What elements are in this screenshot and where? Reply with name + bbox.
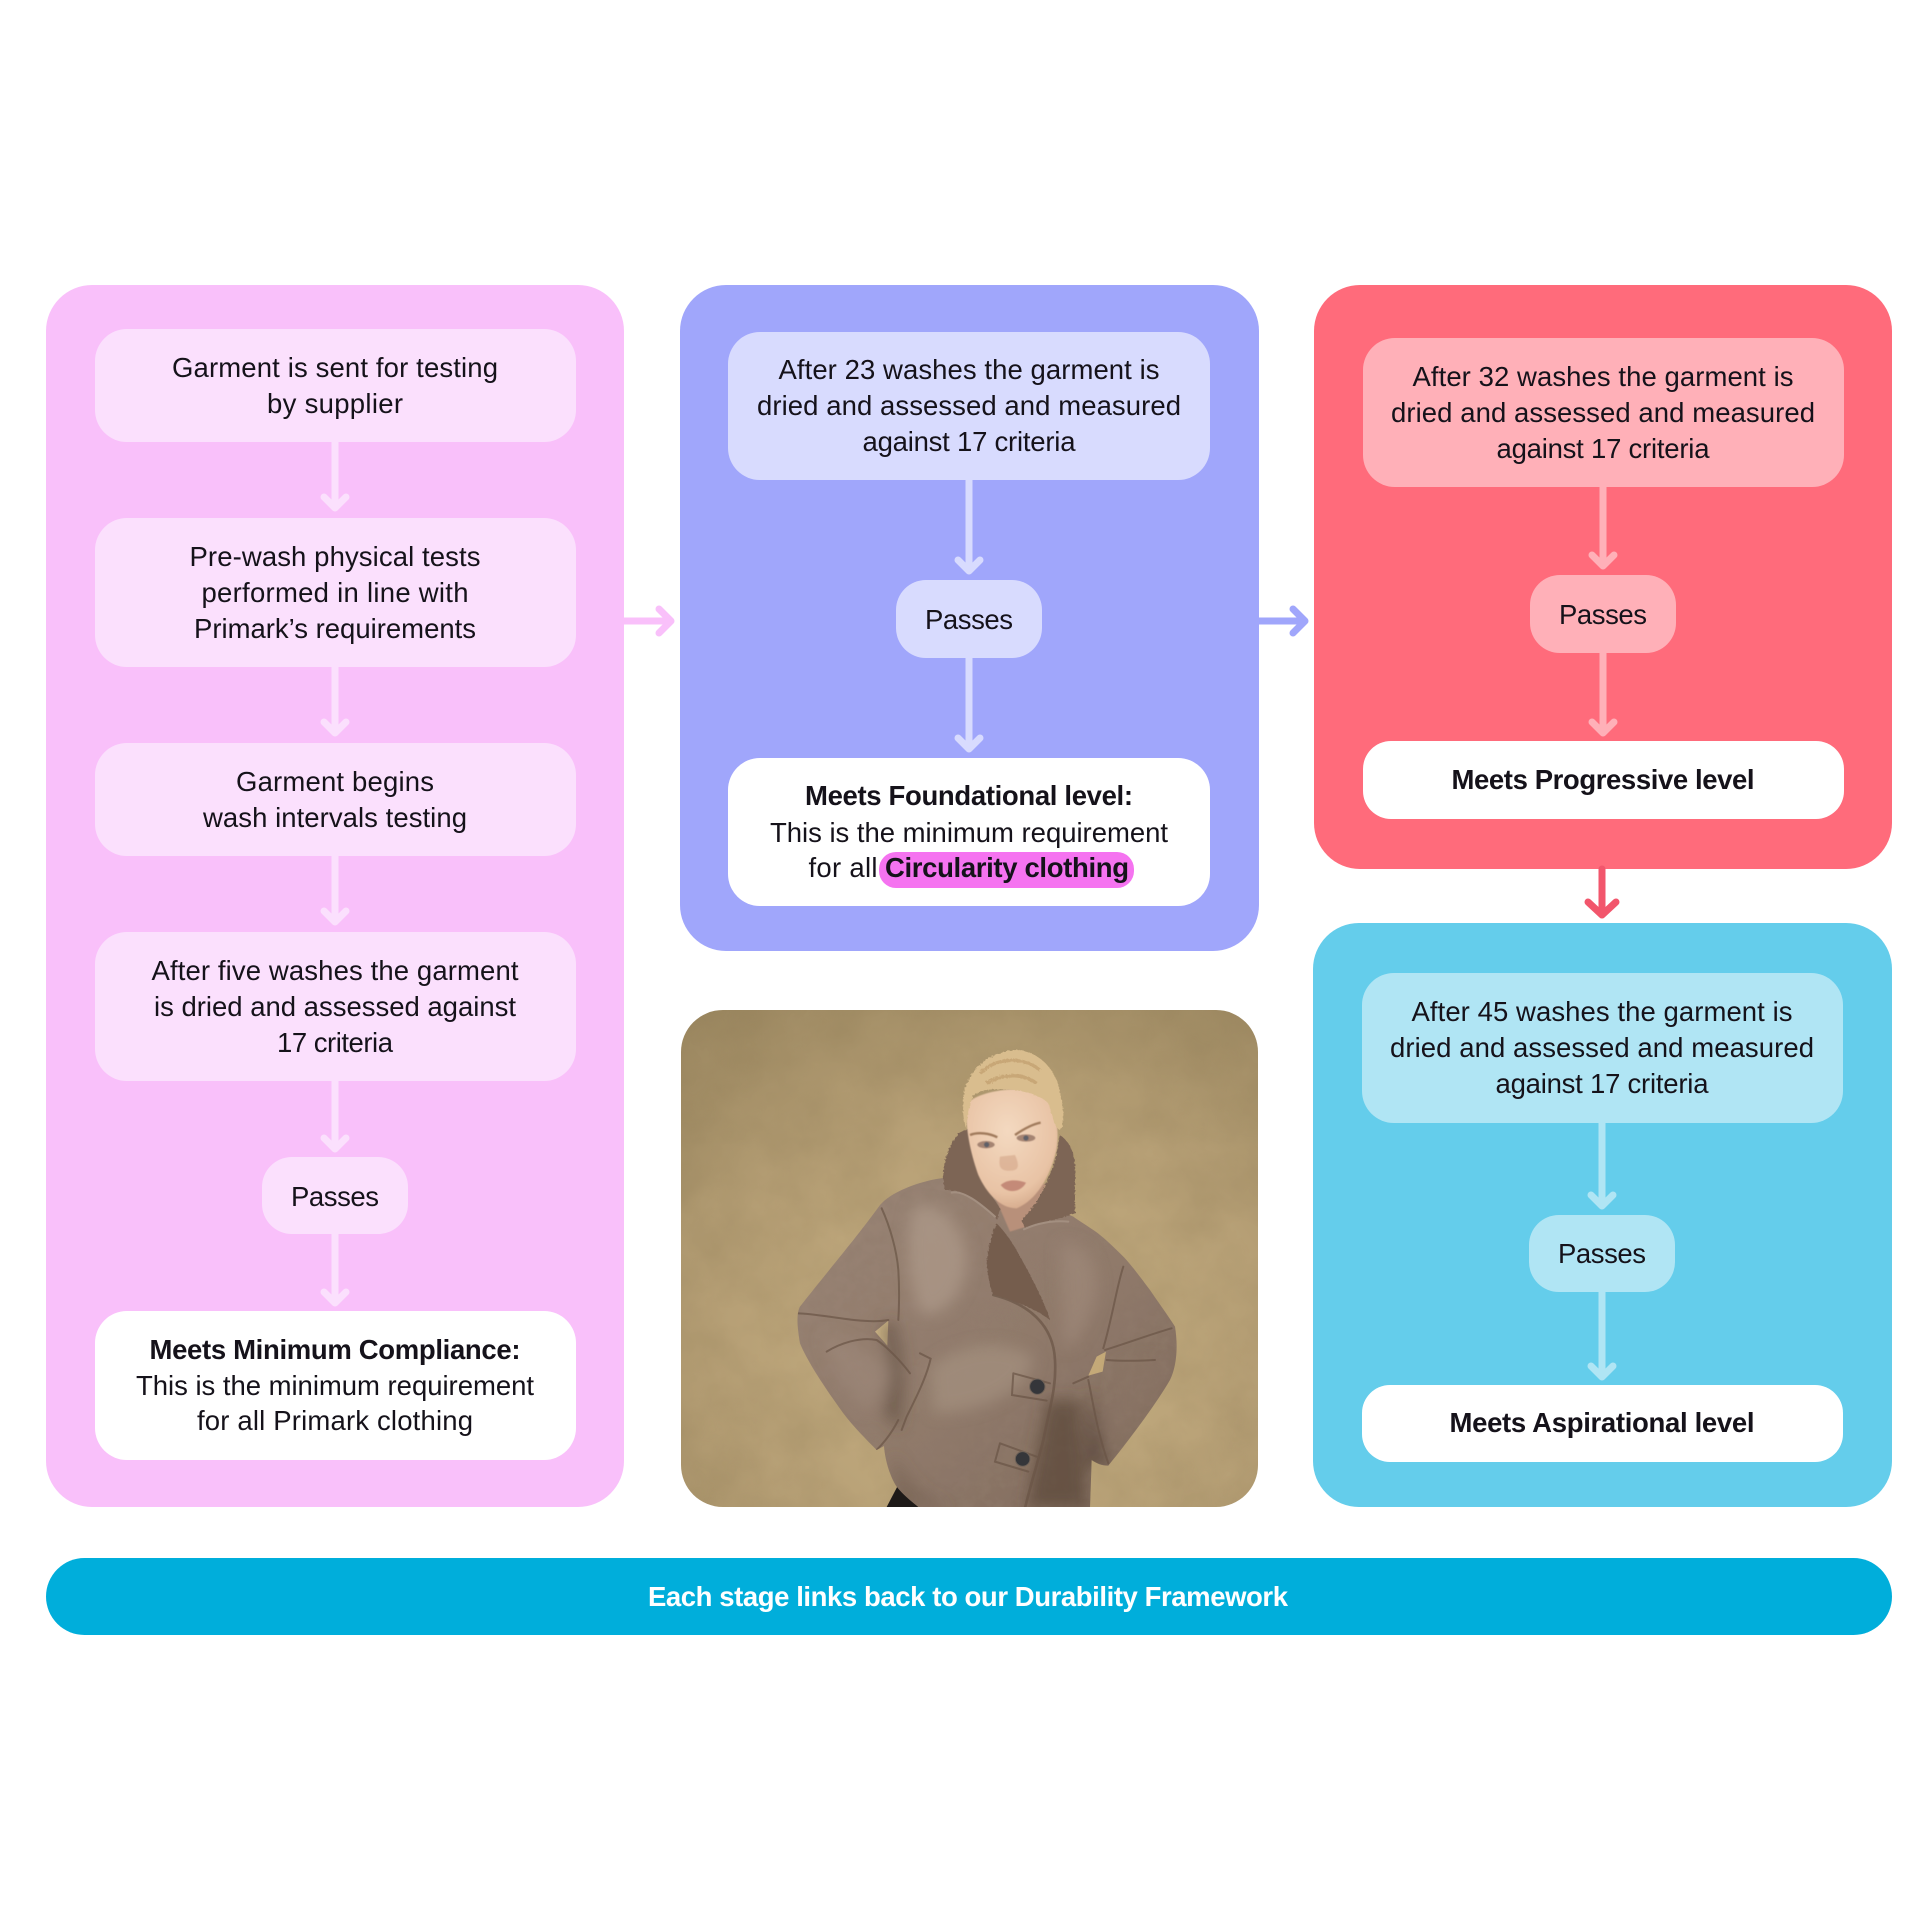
outcome: meets foundational level: for all [808,852,878,883]
passes pill: Passes [291,1181,379,1212]
step: after 23 washes: After 23 washes the garment is [778,354,1160,385]
banner: durability framework [46,1558,1892,1635]
face [967,1089,1058,1208]
step: garment begins wash intervals [95,743,576,856]
arrow: foundational panel to progressive panel [1259,609,1305,633]
arrow: step to passes [958,480,980,571]
step: after 45 washes: against 17 criteria [1496,1068,1709,1099]
lapel fur [987,1223,1050,1320]
step: after 32 washes: After 32 washes the garment is [1412,361,1794,392]
background gaps under the arms [875,1321,888,1346]
passes pill [262,1157,408,1234]
brows eyes nose lips [970,1123,1041,1191]
step: after five washes [95,932,576,1081]
arrow: step to passes [1592,487,1614,566]
left collar fur [943,1129,1000,1220]
outcome: meets aspirational level: Meets Aspirational level [1450,1407,1754,1438]
step: after five washes: After five washes the garment [152,955,519,986]
step: garment sent for testing: by supplier [267,388,403,419]
panel: progressive level [1314,285,1892,869]
arrow: step 1 to step 2 [324,442,346,508]
step: after 32 washes [1363,338,1844,487]
outcome: meets progressive level: Meets Progressive level [1452,764,1754,795]
outcome: meets minimum compliance [95,1311,576,1460]
jacket figure [797,1178,1177,1508]
collar trim [952,1192,1068,1229]
banner: durability framework: Each stage links back to our Durability Framework [648,1581,1289,1612]
panel: foundational level [680,285,1259,951]
outcome: meets foundational level: This is the minimum requirement [770,817,1168,848]
step: garment begins wash intervals: wash intervals testing [202,802,467,833]
step: garment sent for testing: Garment is sent for testing [172,352,498,383]
passes pill [1530,575,1676,653]
arrow: step 4 to passes [324,1081,346,1149]
step: pre-wash physical tests: Primark’s requirements [194,613,476,644]
passes pill: Passes [1558,1238,1646,1269]
buttons [1015,1379,1045,1466]
panel: aspirational level [1313,923,1892,1507]
outcome: meets foundational level: Meets Foundational level: [805,780,1133,811]
step: after 45 washes: After 45 washes the garment is [1412,996,1792,1027]
step: garment sent for testing [95,329,576,442]
right collar fur [1022,1135,1075,1228]
arrow: compliance panel to foundational panel [624,609,671,633]
passes pill [1529,1215,1675,1292]
head and collar [943,1050,1075,1232]
step: after 23 washes: dried and assessed and measured [757,390,1181,421]
step: after 32 washes: dried and assessed and measured [1391,397,1815,428]
neck [993,1183,1047,1232]
step: after 45 washes [1362,973,1843,1123]
arrow: passes to outcome [324,1234,346,1303]
step: pre-wash physical tests: Pre-wash physical tests [190,541,480,572]
outcome: meets minimum compliance: Meets Minimum Compliance: [150,1334,520,1365]
step: pre-wash physical tests [95,518,576,667]
outcome: meets aspirational level [1362,1385,1843,1462]
photo: model wearing shearling jacket [681,1010,1258,1508]
coat seams [798,1208,1172,1508]
hair [963,1050,1063,1129]
outcome: meets foundational level [728,758,1210,906]
arrow: passes to outcome [1592,653,1614,733]
arrow: step 2 to step 3 [324,667,346,733]
outcome: meets minimum compliance: for all Primark clothing [197,1405,473,1436]
arrow: passes to outcome [958,658,980,749]
step: after 23 washes: against 17 criteria [862,426,1076,457]
step: garment begins wash intervals: Garment begins [236,766,434,797]
step: after five washes: is dried and assessed against [154,991,516,1022]
outcome: meets minimum compliance: This is the minimum requirement [136,1370,534,1401]
highlight: circularity clothing: Circularity clothing [885,852,1129,883]
outcome: meets progressive level [1363,741,1844,819]
step: after 23 washes [728,332,1210,480]
arrow: step to passes [1591,1123,1613,1206]
arrow: step 3 to step 4 [324,856,346,922]
step: after 32 washes: against 17 criteria [1496,433,1710,464]
step: after 45 washes: dried and assessed and measured [1390,1032,1814,1063]
step: after five washes: 17 criteria [277,1027,394,1058]
passes pill: Passes [925,604,1013,635]
panel: minimum compliance testing [46,285,624,1507]
step: pre-wash physical tests: performed in line with [202,577,468,608]
passes pill [896,580,1042,658]
arrow: progressive panel to aspirational panel [1588,869,1616,915]
passes pill: Passes [1559,599,1647,630]
arrow: passes to outcome [1591,1292,1613,1377]
coat shading [798,1205,1172,1508]
